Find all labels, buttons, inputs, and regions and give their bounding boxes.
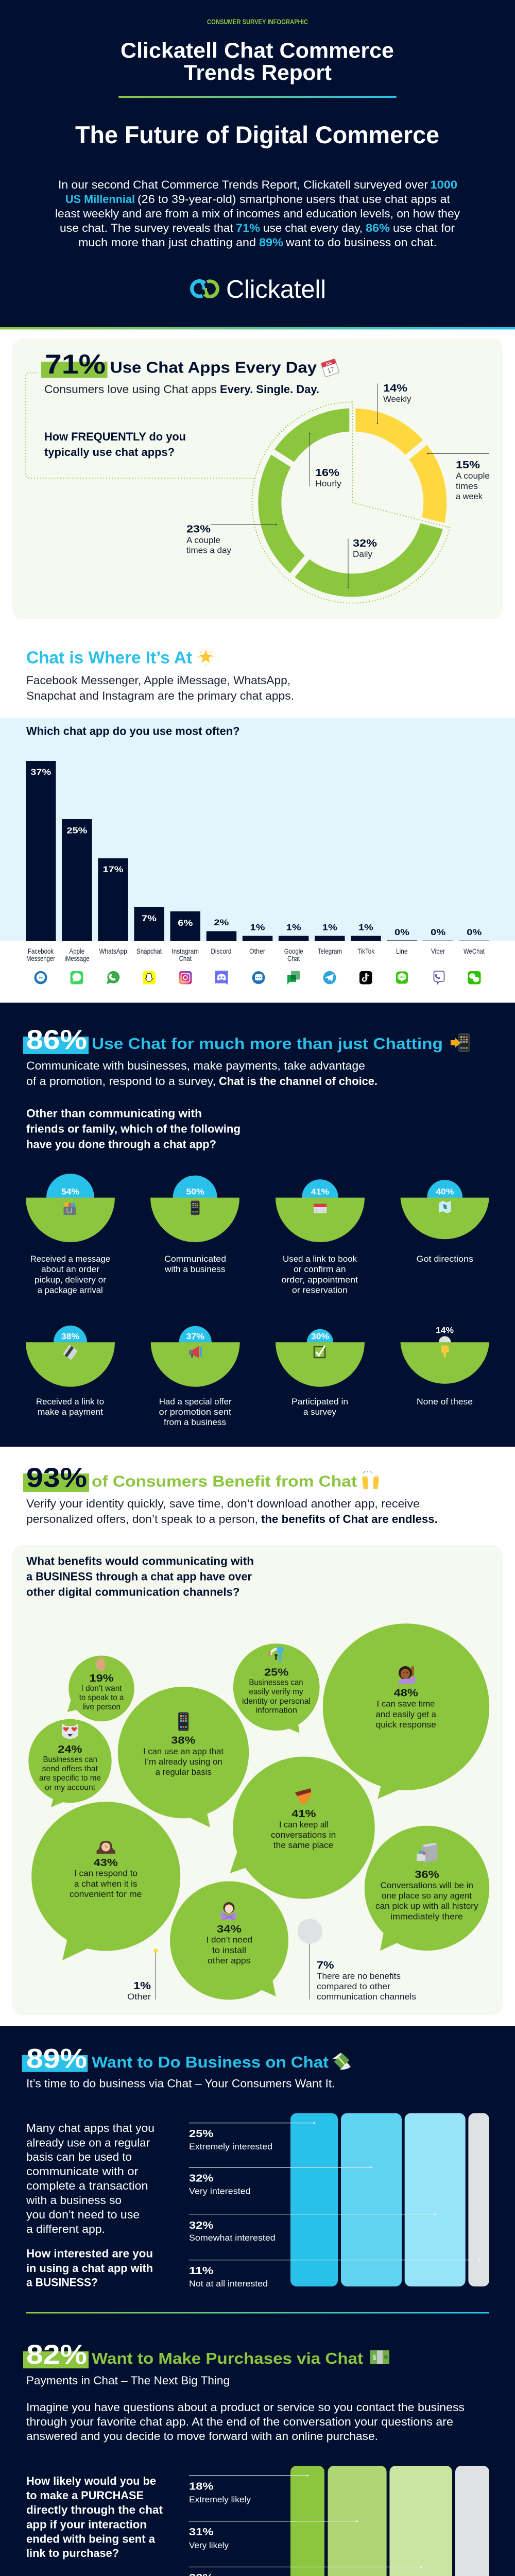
pin: 7% no benefits: 7% xyxy=(317,1960,334,1971)
body text: with a business so xyxy=(26,2194,122,2207)
bubble: 41%: 41% xyxy=(291,1808,316,1820)
card: 40% got directions xyxy=(400,1180,489,1264)
bubble: 25%: information xyxy=(255,1706,297,1715)
bubble: 24%: Businesses can xyxy=(43,1755,97,1764)
body text: a different app. xyxy=(26,2223,105,2235)
subheading: of a promotion, respond to a survey, xyxy=(26,1075,216,1088)
card: 37% special offer: or promotion sent xyxy=(159,1407,231,1417)
bubble: 36%: can pick up with all history xyxy=(375,1901,478,1911)
body text: communicate with or xyxy=(26,2165,138,2178)
panel background xyxy=(12,1545,503,2015)
title: Trends Report xyxy=(184,60,332,84)
subheading: Every. Single. Day. xyxy=(220,383,319,396)
bar chart: chat apps: 0% xyxy=(431,927,445,937)
icon: raised hand xyxy=(95,1656,107,1671)
intro paragraph: 1000 xyxy=(431,178,457,191)
label: 16% hourly: Hourly xyxy=(315,479,342,488)
card: 38% received a link to make a payment xyxy=(26,1326,115,1417)
bar labels: TikTok xyxy=(357,947,375,955)
icon: whatsapp xyxy=(107,971,119,984)
stacked bar: interest: 32% xyxy=(189,2220,214,2231)
card: 41% used a link to book: or confirm an xyxy=(294,1264,346,1274)
card: 37% special offer: from a business xyxy=(164,1417,226,1427)
label: 14% weekly xyxy=(377,383,411,424)
bubble: 36%: immediately there xyxy=(390,1911,463,1922)
label: 15% a couple times a week: A couple xyxy=(456,471,490,481)
bubble: 41%: the same place xyxy=(273,1840,333,1850)
heading: 71%: Use Chat Apps Every Day xyxy=(110,359,317,376)
band: light blue chart background xyxy=(0,718,515,941)
icon: calendar xyxy=(321,359,339,377)
stacked bar: likelihood: 31% xyxy=(189,2527,214,2538)
bubble: 43% xyxy=(31,1802,180,1960)
bubble: 48%: and easily get a xyxy=(376,1709,437,1719)
bubble: 25%: 25% xyxy=(264,1667,288,1679)
label: 23% a couple times a day xyxy=(186,524,277,555)
question xyxy=(26,2247,153,2289)
panel: 71% use chat apps every day xyxy=(12,339,503,619)
heading: 71% xyxy=(41,349,317,380)
question: directly through the chat xyxy=(26,2503,163,2516)
bubble: 25% xyxy=(233,1643,320,1733)
icon: snapchat xyxy=(143,971,156,984)
pin: 7% no benefits: compared to other xyxy=(317,1981,390,1991)
stacked bar: interest: 25% xyxy=(189,2128,214,2140)
bubble: 43%: convenient for me xyxy=(70,1889,142,1899)
label: 32% daily xyxy=(348,538,377,588)
card: 37% special offer xyxy=(151,1326,240,1427)
icon: instagram xyxy=(179,971,192,984)
card: 41% used a link to book: order, appointment xyxy=(281,1275,358,1285)
heading: 89%: Want to Do Business on Chat xyxy=(92,2053,329,2071)
heading: 93% xyxy=(23,1463,357,1493)
pin: 7% no benefits: There are no benefits xyxy=(317,1971,401,1981)
bubble: 34%: I don’t need xyxy=(206,1935,252,1945)
bubble: 41%: conversations in xyxy=(271,1830,336,1840)
panel: 89% want to do business on chat, 82% want to make purchases xyxy=(0,2026,515,2576)
card: 30% participated in a survey: a survey xyxy=(303,1407,336,1417)
heading: 89% xyxy=(22,2043,329,2074)
bar chart: chat apps: 0% xyxy=(467,927,482,937)
card: 30% participated in a survey xyxy=(276,1329,365,1417)
card: 54% received a message xyxy=(26,1174,115,1295)
bubble: 36%: Conversations will be in xyxy=(380,1880,473,1890)
heading: 82%: 82% xyxy=(26,2340,87,2370)
bubble: 19%: 19% xyxy=(90,1673,114,1684)
question: a BUSINESS? xyxy=(26,2276,98,2289)
bar labels: Chat xyxy=(287,954,300,962)
body text: answered and you decide to move forward with an online purchase. xyxy=(26,2430,378,2443)
text: primary apps xyxy=(26,674,294,702)
question: link to purchase? xyxy=(26,2547,119,2560)
bubble: 34% xyxy=(170,1882,288,2000)
subheading: Consumers love using Chat apps xyxy=(44,383,217,396)
icon: shopping bag xyxy=(64,1202,76,1215)
bubble: 41%: I can keep all xyxy=(279,1820,329,1829)
pin: 1% other: Other xyxy=(127,1992,151,2002)
heading: 93%: of Consumers Benefit from Chat xyxy=(92,1472,357,1490)
body text: already use on a regular xyxy=(26,2136,150,2149)
bubble: 36%: 36% xyxy=(415,1869,439,1880)
bubble: 38%: a regular basis xyxy=(156,1767,212,1777)
bubble: 38% xyxy=(118,1687,249,1827)
subheading xyxy=(26,1497,438,1526)
stacked bar: interest: Very interested xyxy=(189,2187,251,2196)
bubble: 41% xyxy=(230,1757,375,1899)
bubble: 48% xyxy=(323,1623,489,1799)
label: 15% a couple times a week: a week xyxy=(456,492,483,501)
question: How likely would you be xyxy=(26,2475,156,2487)
bar labels: Telegram xyxy=(318,947,342,955)
question: to make a PURCHASE xyxy=(26,2489,144,2502)
icon: key and lock xyxy=(269,1647,284,1662)
panel: 93% benefit from chat xyxy=(12,1463,503,2015)
body text: complete a transaction xyxy=(26,2179,148,2192)
subheading: personalized offers, don’t speak to a person, xyxy=(26,1513,258,1526)
bar chart: chat apps: 17% xyxy=(103,865,124,874)
card: 41% used a link to book: or reservation xyxy=(292,1285,348,1295)
card: 41% used a link to book: 41% xyxy=(311,1187,329,1197)
bar labels: iMessage xyxy=(65,954,90,962)
bubble: 34%: other apps xyxy=(208,1956,251,1965)
heading: 86%: 86% xyxy=(26,1025,87,1055)
bubble: 43%: I can respond to xyxy=(74,1869,138,1878)
icon: tiktok xyxy=(359,971,372,984)
icon: raised hands xyxy=(362,1471,379,1489)
bubble: 25%: identity or personal xyxy=(242,1697,311,1706)
bar labels: Snapchat xyxy=(136,947,162,955)
icon: phone xyxy=(178,1712,188,1731)
bubble: 19%: I don’t want xyxy=(81,1684,122,1693)
card: 14% none of these: 14% xyxy=(436,1325,454,1335)
icon: wechat xyxy=(468,971,481,984)
question xyxy=(26,1555,254,1599)
subheading: Chat is the channel of choice. xyxy=(219,1075,377,1088)
intro paragraph: least weekly and are from a mix of incomes and education levels, on how they xyxy=(55,207,460,220)
icon: telegram xyxy=(323,971,336,984)
body text: basis can be used to xyxy=(26,2150,132,2163)
icon: discord xyxy=(215,971,228,985)
bubble: 24%: or my account xyxy=(45,1784,96,1792)
bar labels: Line xyxy=(396,947,408,955)
title xyxy=(121,38,394,84)
app icons row xyxy=(34,971,481,985)
bubble: 19% xyxy=(67,1656,134,1721)
pin: 1% other: 1% xyxy=(133,1980,151,1992)
logo: Clickatell: Clickatell xyxy=(226,276,326,303)
label: 15% a couple times a week: times xyxy=(456,481,478,491)
icon: banknote: $ xyxy=(373,2354,376,2361)
bar labels: Apple xyxy=(69,947,84,955)
label: 16% hourly xyxy=(309,433,342,488)
card: 37% special offer: Had a special offer xyxy=(159,1397,232,1406)
title: Clickatell Chat Commerce xyxy=(121,38,394,62)
card: 38% received a link to make a payment: Received a link to xyxy=(36,1397,104,1406)
pin: 7% no benefits xyxy=(298,1919,416,2002)
intro paragraph: In our second Chat Commerce Trends Report, Clickatell surveyed over xyxy=(58,178,428,191)
donut chart: frequency xyxy=(26,373,450,603)
icon: money with wings xyxy=(333,2053,351,2070)
bar chart: chat apps: 7% xyxy=(142,913,157,923)
bubble: 48%: 48% xyxy=(394,1688,418,1699)
subheading: Payments in Chat – The Next Big Thing xyxy=(26,2374,230,2387)
bubble: 38%: 38% xyxy=(171,1735,196,1747)
divider rule xyxy=(26,2312,489,2313)
card: 30% participated in a survey: Participated in xyxy=(291,1397,348,1406)
question: Which chat app do you use most often? xyxy=(26,725,240,738)
icon: calendar: JUL xyxy=(325,361,333,367)
icon: line xyxy=(396,972,408,984)
bar chart: chat apps: 1% xyxy=(322,922,337,933)
card: 54% received a message: Received a message xyxy=(30,1254,110,1264)
icon: credit card xyxy=(63,1345,78,1360)
heading: 89%: 89% xyxy=(26,2043,87,2074)
card: 14% none of these: None of these xyxy=(417,1397,473,1406)
card: 54% received a message: pickup, delivery or xyxy=(35,1275,106,1285)
heading: 93%: 93% xyxy=(26,1463,87,1493)
bubble: 19%: live person xyxy=(82,1703,121,1711)
stacked bar: interest xyxy=(189,2113,489,2289)
label: 15% a couple times a week xyxy=(427,453,490,501)
card: 54% received a message: a package arrival xyxy=(38,1285,103,1295)
bubble: 19%: to speak to a xyxy=(79,1693,124,1702)
subheading: Verify your identity quickly, save time, don’t download another app, receive xyxy=(26,1497,420,1510)
bubble: 25%: Businesses can xyxy=(249,1678,303,1687)
intro paragraph: 86% xyxy=(366,222,390,234)
subheading: the benefits of Chat are endless. xyxy=(261,1513,438,1526)
intro paragraph: 71% xyxy=(236,222,260,234)
text: primary apps: Snapchat and Instagram are the primary chat apps. xyxy=(26,689,294,702)
bubble: 24%: 24% xyxy=(58,1744,82,1755)
heading: 86%: Use Chat for much more than just Chatting xyxy=(92,1035,443,1053)
bar chart: chat apps: 1% xyxy=(250,922,265,933)
card: 50% communicated with a business: 50% xyxy=(186,1187,204,1197)
bubble: 48%: quick response xyxy=(376,1720,436,1730)
icon: map xyxy=(439,1201,451,1213)
title rule xyxy=(118,96,397,98)
card: 54% received a message: 54% xyxy=(61,1187,79,1197)
intro paragraph: (26 to 39-year-old) smartphone users that use chat apps at xyxy=(138,193,450,206)
stacked bar: interest: Somewhat interested xyxy=(189,2233,276,2243)
card: 38% received a link to make a payment: 38% xyxy=(61,1331,79,1341)
icon: check box xyxy=(314,1346,325,1358)
bar labels: Instagram xyxy=(172,947,199,955)
bar labels: Facebook xyxy=(28,947,54,955)
question: have you done through a chat app? xyxy=(26,1138,216,1151)
bar chart: chat apps xyxy=(26,761,489,941)
heading: 71%: 71% xyxy=(45,349,106,380)
label: 14% weekly: 14% xyxy=(383,383,407,394)
question: How interested are you xyxy=(26,2247,153,2260)
label: 23% a couple times a day: times a day xyxy=(186,545,231,555)
card: 40% got directions: 40% xyxy=(436,1187,454,1197)
intro paragraph: use chat every day, xyxy=(263,222,363,234)
stacked bar: interest: Not at all interested xyxy=(189,2279,268,2289)
icon: calendar: 17 xyxy=(326,365,336,375)
pin: 7% no benefits: communication channels xyxy=(317,1992,416,2002)
card: 41% used a link to book xyxy=(276,1179,365,1295)
icon: thumbs down xyxy=(441,1346,449,1358)
label: 32% daily: Daily xyxy=(353,549,372,559)
stacked bar: interest: 32% xyxy=(189,2173,214,2184)
bar labels: Viber xyxy=(431,947,445,955)
text: primary apps: Facebook Messenger, Apple iMessage, WhatsApp, xyxy=(26,674,290,687)
bar chart: chat apps: 0% xyxy=(394,927,409,937)
icon: filing cabinet xyxy=(417,1843,438,1863)
bubble: 24%: send offers that xyxy=(42,1765,98,1773)
panel: chat is where it's at xyxy=(0,648,515,985)
bar labels xyxy=(26,947,485,962)
bar chart: chat apps: 37% xyxy=(30,767,51,777)
eyebrow: CONSUMER SURVEY INFOGRAPHIC xyxy=(207,18,308,26)
bubble: 43%: 43% xyxy=(94,1857,118,1869)
body text: Many chat apps that you xyxy=(26,2122,154,2134)
question: typically use chat apps? xyxy=(44,446,175,459)
card: 14% none of these xyxy=(400,1325,489,1406)
icon: other chat xyxy=(252,971,265,984)
body text: you don’t need to use xyxy=(26,2208,140,2221)
icon: woman crossing arms xyxy=(220,1902,237,1920)
body text xyxy=(26,2401,465,2443)
bubble: 25%: easily verify my xyxy=(249,1688,303,1697)
bar chart: chat apps: 25% xyxy=(66,826,87,836)
bubble: 24%: are specific to me xyxy=(39,1774,101,1783)
header section xyxy=(0,0,515,330)
icon: phone xyxy=(191,1200,200,1215)
icon: imessage xyxy=(70,971,83,984)
bar labels: Discord xyxy=(211,947,231,955)
bar labels: Chat xyxy=(179,954,192,962)
question: What benefits would communicating with xyxy=(26,1555,254,1567)
card: 37% special offer: 37% xyxy=(186,1331,204,1341)
card: 40% got directions: Got directions xyxy=(417,1254,473,1264)
question: ended with being sent a xyxy=(26,2533,156,2545)
stacked bar: likelihood: 18% xyxy=(189,2481,214,2493)
bubble: 43%: a chat when it is xyxy=(74,1879,137,1889)
bubble: 36% xyxy=(365,1826,489,1951)
card: 41% used a link to book: Used a link to book xyxy=(283,1254,357,1264)
icon: star xyxy=(197,649,214,666)
bar chart: chat apps: 2% xyxy=(214,918,229,927)
bar labels: Google xyxy=(284,947,303,955)
icon: megaphone xyxy=(189,1346,202,1358)
icon: phone with arrow xyxy=(451,1033,470,1052)
bar labels: WeChat xyxy=(464,947,485,955)
label: 14% weekly: Weekly xyxy=(383,394,411,404)
bubble: 38%: I’m already using on xyxy=(145,1757,222,1767)
bubble: 48%: I can save time xyxy=(377,1699,435,1709)
stacked bar: likelihood: Extremely likely xyxy=(189,2495,251,2504)
question: Other than communicating with xyxy=(26,1107,202,1120)
card: 50% communicated with a business: Communicated xyxy=(164,1254,226,1264)
subheading xyxy=(44,383,319,396)
heading: 82% xyxy=(23,2340,363,2370)
intro paragraph: want to do business on chat. xyxy=(285,236,437,249)
intro paragraph: US Millennial xyxy=(65,193,135,206)
subheading xyxy=(26,1059,377,1088)
bar labels: Other xyxy=(249,947,265,955)
subheading: Communicate with businesses, make payments, take advantage xyxy=(26,1059,365,1072)
icon: banknote xyxy=(370,2350,389,2364)
question: a BUSINESS through a chat app have over xyxy=(26,1570,252,1583)
body text: through your favorite chat app. At the end of the conversation your questions are xyxy=(26,2415,453,2428)
intro paragraph: use chat for xyxy=(393,222,455,234)
bubble: 36%: one place so any agent xyxy=(382,1891,472,1901)
icon: cat with heart eyes xyxy=(62,1723,78,1739)
card: 50% communicated with a business xyxy=(150,1176,239,1274)
body text: Imagine you have questions about a product or service so you contact the business xyxy=(26,2401,465,2414)
bubble: 24% xyxy=(28,1719,112,1807)
card: 30% participated in a survey: 30% xyxy=(311,1331,329,1341)
question: app if your interaction xyxy=(26,2518,147,2531)
icon: calendar xyxy=(314,1204,327,1213)
stacked bar: interest: 11% xyxy=(189,2265,214,2277)
card: 50% communicated with a business: with a business xyxy=(164,1264,226,1274)
question: How FREQUENTLY do you xyxy=(44,430,186,443)
icon: viber xyxy=(434,971,444,984)
subheading: It’s time to do business via Chat – Your Consumers Want It. xyxy=(26,2077,335,2090)
question: friends or family, which of the following xyxy=(26,1122,241,1136)
question xyxy=(26,2475,163,2560)
bar labels: WhatsApp xyxy=(99,947,127,955)
bubble: 34%: 34% xyxy=(217,1924,242,1935)
icon: woman raising hand xyxy=(398,1666,416,1684)
label: 23% a couple times a day: A couple xyxy=(186,535,220,545)
bar chart: chat apps: 1% xyxy=(286,922,301,933)
question: in using a chat app with xyxy=(26,2262,153,2275)
question xyxy=(44,430,186,459)
label: 15% a couple times a week: 15% xyxy=(456,460,480,471)
icon: google chat xyxy=(287,971,300,985)
icon: folder xyxy=(295,1788,312,1805)
question xyxy=(26,1107,241,1151)
body text xyxy=(26,2122,154,2235)
intro paragraph: much more than just chatting and xyxy=(78,236,256,249)
stacked bar: likelihood xyxy=(189,2466,489,2576)
card: 54% received a message: about an order xyxy=(41,1264,99,1274)
stacked bar: interest: Extremely interested xyxy=(189,2142,272,2151)
icon: line: LINE xyxy=(399,976,405,979)
bar chart: chat apps: 6% xyxy=(178,918,193,928)
bar chart: chat apps: 1% xyxy=(358,922,373,933)
subtitle: The Future of Digital Commerce xyxy=(75,121,439,148)
heading: 86% xyxy=(23,1025,443,1055)
question: other digital communication channels? xyxy=(26,1586,240,1599)
pin: 1% other xyxy=(127,1948,158,2002)
label: 32% daily: 32% xyxy=(353,538,377,549)
icon: messenger xyxy=(34,971,47,984)
intro paragraph xyxy=(55,178,460,249)
bubble: 38%: I can use an app that xyxy=(143,1747,224,1756)
panel: 86% use chat for much more xyxy=(0,1003,515,1447)
icon: mantel clock xyxy=(97,1841,115,1854)
bar labels: Messenger xyxy=(26,954,55,962)
heading: Chat is Where It’s At xyxy=(26,648,192,667)
label: 16% hourly: 16% xyxy=(315,467,339,479)
intro paragraph: 89% xyxy=(259,236,283,249)
heading: 82%: Want to Make Purchases via Chat xyxy=(92,2349,363,2367)
bubble: 34%: to install xyxy=(212,1945,246,1955)
stacked bar: likelihood: Very likely xyxy=(189,2540,229,2550)
card: 38% received a link to make a payment: make a payment xyxy=(38,1407,103,1417)
label: 23% a couple times a day: 23% xyxy=(186,524,211,535)
intro paragraph: use chat. The survey reveals that xyxy=(60,222,233,234)
